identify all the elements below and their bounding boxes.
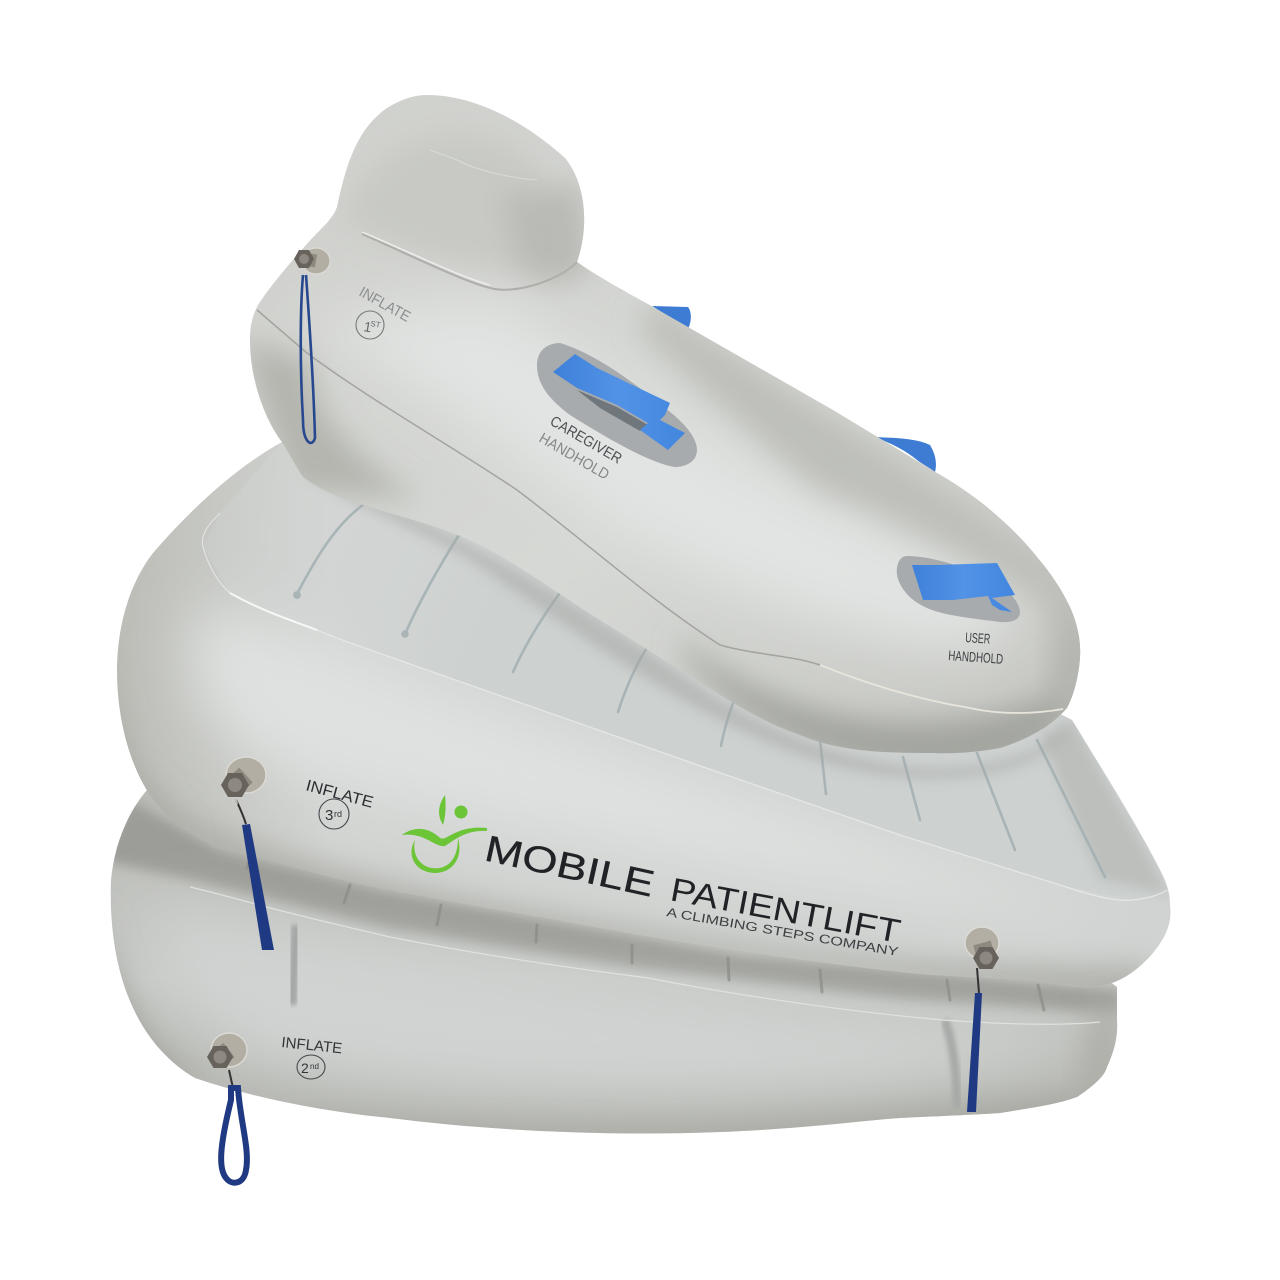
inflate 2nd label: 2 [301, 1060, 309, 1076]
wedge ribs [294, 505, 1105, 877]
user handhold label [948, 629, 1004, 667]
brand wordmark [481, 828, 904, 959]
brand wordmark: PATIENTLIFT [668, 871, 904, 950]
bottom air cushion [100, 790, 1120, 1150]
user handhold label: USER [965, 629, 991, 647]
inflate 3rd label: 3 [325, 807, 333, 824]
caregiver handhold label: HANDHOLD [536, 430, 612, 484]
rear blue strap loops [652, 306, 936, 472]
inflate 2nd label: nd [310, 1062, 319, 1071]
valve 2nd with lanyard [207, 1033, 247, 1183]
user handhold label: HANDHOLD [948, 647, 1004, 667]
inflate 3rd label: rd [334, 809, 342, 819]
caregiver handhold plate and strap [537, 343, 697, 467]
body seam [257, 310, 820, 665]
top seat cushion [240, 95, 1100, 775]
product photo: stacked inflatable patient lift [110, 95, 1170, 1186]
bottom cushion ribs [247, 853, 1044, 1010]
valve right with lanyard [965, 927, 999, 1112]
brand wordmark: MOBILE [481, 828, 658, 905]
bottom cushion seam [190, 887, 1100, 1024]
middle wedge cushion [90, 442, 1170, 1010]
icon: Mobile Patientlift green logo [402, 795, 487, 873]
wedge seam [202, 513, 230, 593]
brand wordmark: A CLIMBING STEPS COMPANY [665, 905, 900, 959]
inflate 2nd label: INFLATE [281, 1034, 343, 1057]
valve 1st with lanyard [294, 248, 330, 443]
inflate 1st label: ST [370, 319, 381, 330]
inflate 3rd label [304, 777, 375, 829]
caregiver handhold label: CAREGIVER [547, 413, 625, 468]
head pillow seam [362, 234, 577, 290]
valve 3rd with lanyard [221, 757, 274, 950]
caregiver handhold label [536, 413, 625, 484]
inflate 2nd label [281, 1034, 343, 1079]
inflate 1st label: INFLATE [356, 284, 413, 326]
shadow cast by top cushion on wedge [300, 470, 1075, 778]
user handhold plate and strap [897, 556, 1020, 622]
inflate 3rd label: INFLATE [304, 777, 375, 812]
inflate 1st label: 1 [362, 318, 373, 335]
